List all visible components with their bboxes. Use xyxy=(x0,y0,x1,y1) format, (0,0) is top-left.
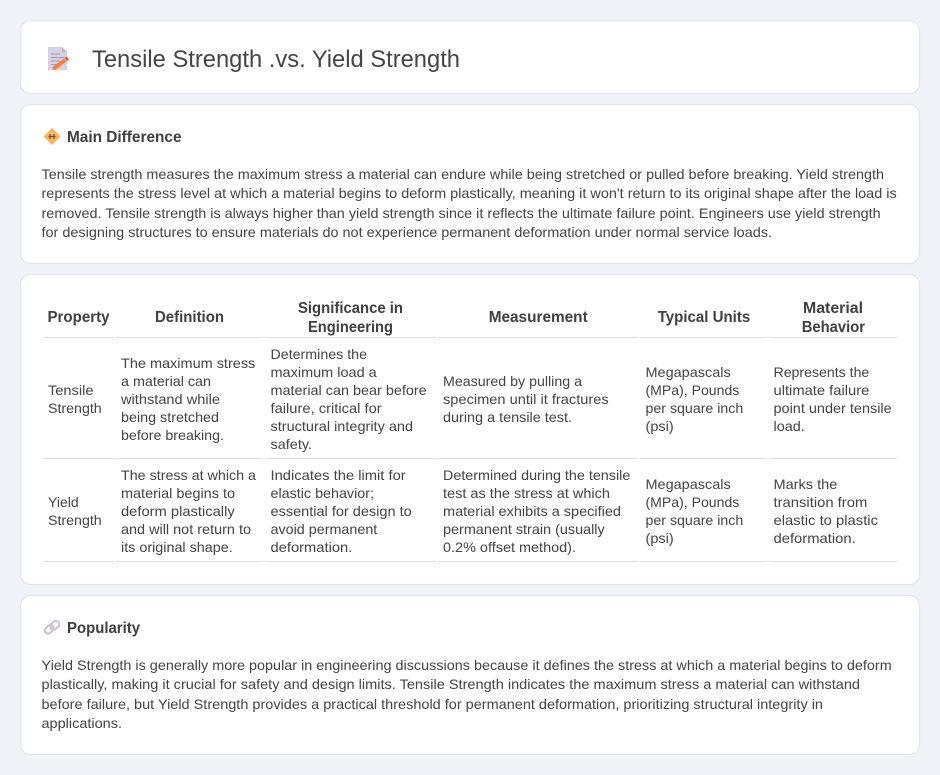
table header row xyxy=(48,300,865,336)
table row: yield strength: deform plastically xyxy=(121,503,235,519)
table row: yield strength: test as the stress at which xyxy=(443,485,610,501)
table row: tensile strength: point under tensile xyxy=(774,400,892,416)
table row: tensile strength: Megapascals xyxy=(646,364,731,380)
table row: tensile strength: Strength xyxy=(48,400,102,416)
table row: yield strength: permanent strain (usually xyxy=(443,521,605,537)
table row: tensile strength: material can bear before xyxy=(270,382,427,398)
table row: tensile strength: safety. xyxy=(270,436,312,452)
table row: yield strength: deformation. xyxy=(270,539,352,555)
table header row: Measurement xyxy=(489,309,588,326)
table row: yield strength: The stress at which a xyxy=(121,467,256,483)
text block: main difference paragraph: represents the stress level at which a material begins to deform plastically, meaning it won't return to its original shape after the load is xyxy=(42,185,897,201)
text block: popularity paragraph xyxy=(42,657,892,731)
text block: main difference paragraph: Tensile strength measures the maximum stress a material can endure while being stretched or pulled before breaking. Yield strength xyxy=(42,166,884,182)
panel: main difference xyxy=(20,104,920,264)
table row: tensile strength: load. xyxy=(774,418,805,434)
text block: main difference paragraph xyxy=(42,166,897,240)
table row: yield strength: Indicates the limit for xyxy=(270,467,406,483)
table row: tensile strength: structural integrity and xyxy=(270,418,413,434)
table row: yield strength: deformation. xyxy=(774,530,856,546)
table row: yield strength: Determined during the tensile xyxy=(443,467,631,483)
table row: tensile strength: being stretched xyxy=(121,409,219,425)
table row: yield strength: and will not return to xyxy=(121,521,251,537)
text block: main difference paragraph: for designing structures to ensure materials do not experience permanent deformation under normal service loads. xyxy=(42,224,772,240)
table header row: Engineering xyxy=(308,319,393,336)
table row: yield strength xyxy=(48,467,878,555)
table row: yield strength: (MPa), Pounds xyxy=(646,494,739,510)
table header row: Behavior xyxy=(802,319,865,336)
table header row: Typical Units xyxy=(658,309,750,326)
text block: popularity paragraph: applications. xyxy=(42,715,122,731)
table row: yield strength: Marks the xyxy=(774,476,838,492)
table row: yield strength: essential for design to xyxy=(270,503,412,519)
panel: comparison table xyxy=(20,274,920,584)
table row: tensile strength: Measured by pulling a xyxy=(443,373,582,389)
table row: yield strength: avoid permanent xyxy=(270,521,377,537)
table row: yield strength: Yield xyxy=(48,494,79,510)
table row: tensile strength: maximum load a xyxy=(270,364,377,380)
table row: tensile strength: ultimate failure xyxy=(774,382,870,398)
table row: tensile strength: withstand while xyxy=(120,391,220,407)
icon: link xyxy=(44,620,60,635)
table row: tensile strength: Represents the xyxy=(774,364,870,380)
table row: tensile strength: Determines the xyxy=(270,346,367,362)
text block: main difference paragraph: removed. Tensile strength is always higher than yield strength since it reflects the ultimate failure point. Engineers use yield strength xyxy=(42,205,881,221)
panel: popularity xyxy=(20,596,920,754)
table row: tensile strength: The maximum stress xyxy=(121,355,255,371)
table row: tensile strength: during a tensile test. xyxy=(443,409,572,425)
table header row: Material xyxy=(803,300,863,317)
table row: tensile strength xyxy=(48,346,892,452)
table row: yield strength: 0.2% offset method). xyxy=(443,539,576,555)
text block: popularity paragraph: before failure, but Yield Strength provides a practical threshold for permanent deformation, prioritizing structural integrity in xyxy=(42,696,823,712)
table row: yield strength: per square inch xyxy=(646,512,743,528)
table row: yield strength: its original shape. xyxy=(121,539,233,555)
table row: yield strength: elastic to plastic xyxy=(774,512,878,528)
icon: memo with pencil xyxy=(48,47,69,70)
table row: tensile strength: failure, critical for xyxy=(270,400,382,416)
table row: tensile strength: specimen until it fractures xyxy=(443,391,609,407)
heading: popularity: Popularity xyxy=(67,620,140,637)
heading: main difference: Main Difference xyxy=(67,129,182,146)
table row: yield strength: Strength xyxy=(48,512,102,528)
table row: yield strength: material begins to xyxy=(121,485,235,501)
table row: tensile strength: (MPa), Pounds xyxy=(646,382,739,398)
icon: orange diamond xyxy=(44,128,60,145)
table row: tensile strength: Tensile xyxy=(48,382,94,398)
table row: tensile strength: before breaking. xyxy=(121,427,224,443)
table row: yield strength: elastic behavior; xyxy=(270,485,374,501)
table header row: Significance in xyxy=(298,300,403,317)
text block: popularity paragraph: plastically, making it crucial for safety and design limits. Tensile Strength indicates the maximum stress a material can withstand xyxy=(42,676,860,692)
table row: tensile strength: a material can xyxy=(121,373,211,389)
table header row: Definition xyxy=(155,309,224,326)
table row: yield strength: transition from xyxy=(774,494,867,510)
table row: yield strength: material exhibits a specified xyxy=(443,503,621,519)
table row: yield strength: (psi) xyxy=(646,530,674,546)
table row: yield strength: Megapascals xyxy=(646,476,731,492)
table row: tensile strength: (psi) xyxy=(646,418,674,434)
table row: tensile strength: per square inch xyxy=(646,400,743,416)
panel: title header xyxy=(20,20,920,94)
title: Tensile Strength .vs. Yield Strength xyxy=(92,46,460,73)
text block: popularity paragraph: Yield Strength is generally more popular in engineering discussions because it defines the stress at which a material begins to deform xyxy=(42,657,892,673)
table header row: Property xyxy=(48,309,110,326)
